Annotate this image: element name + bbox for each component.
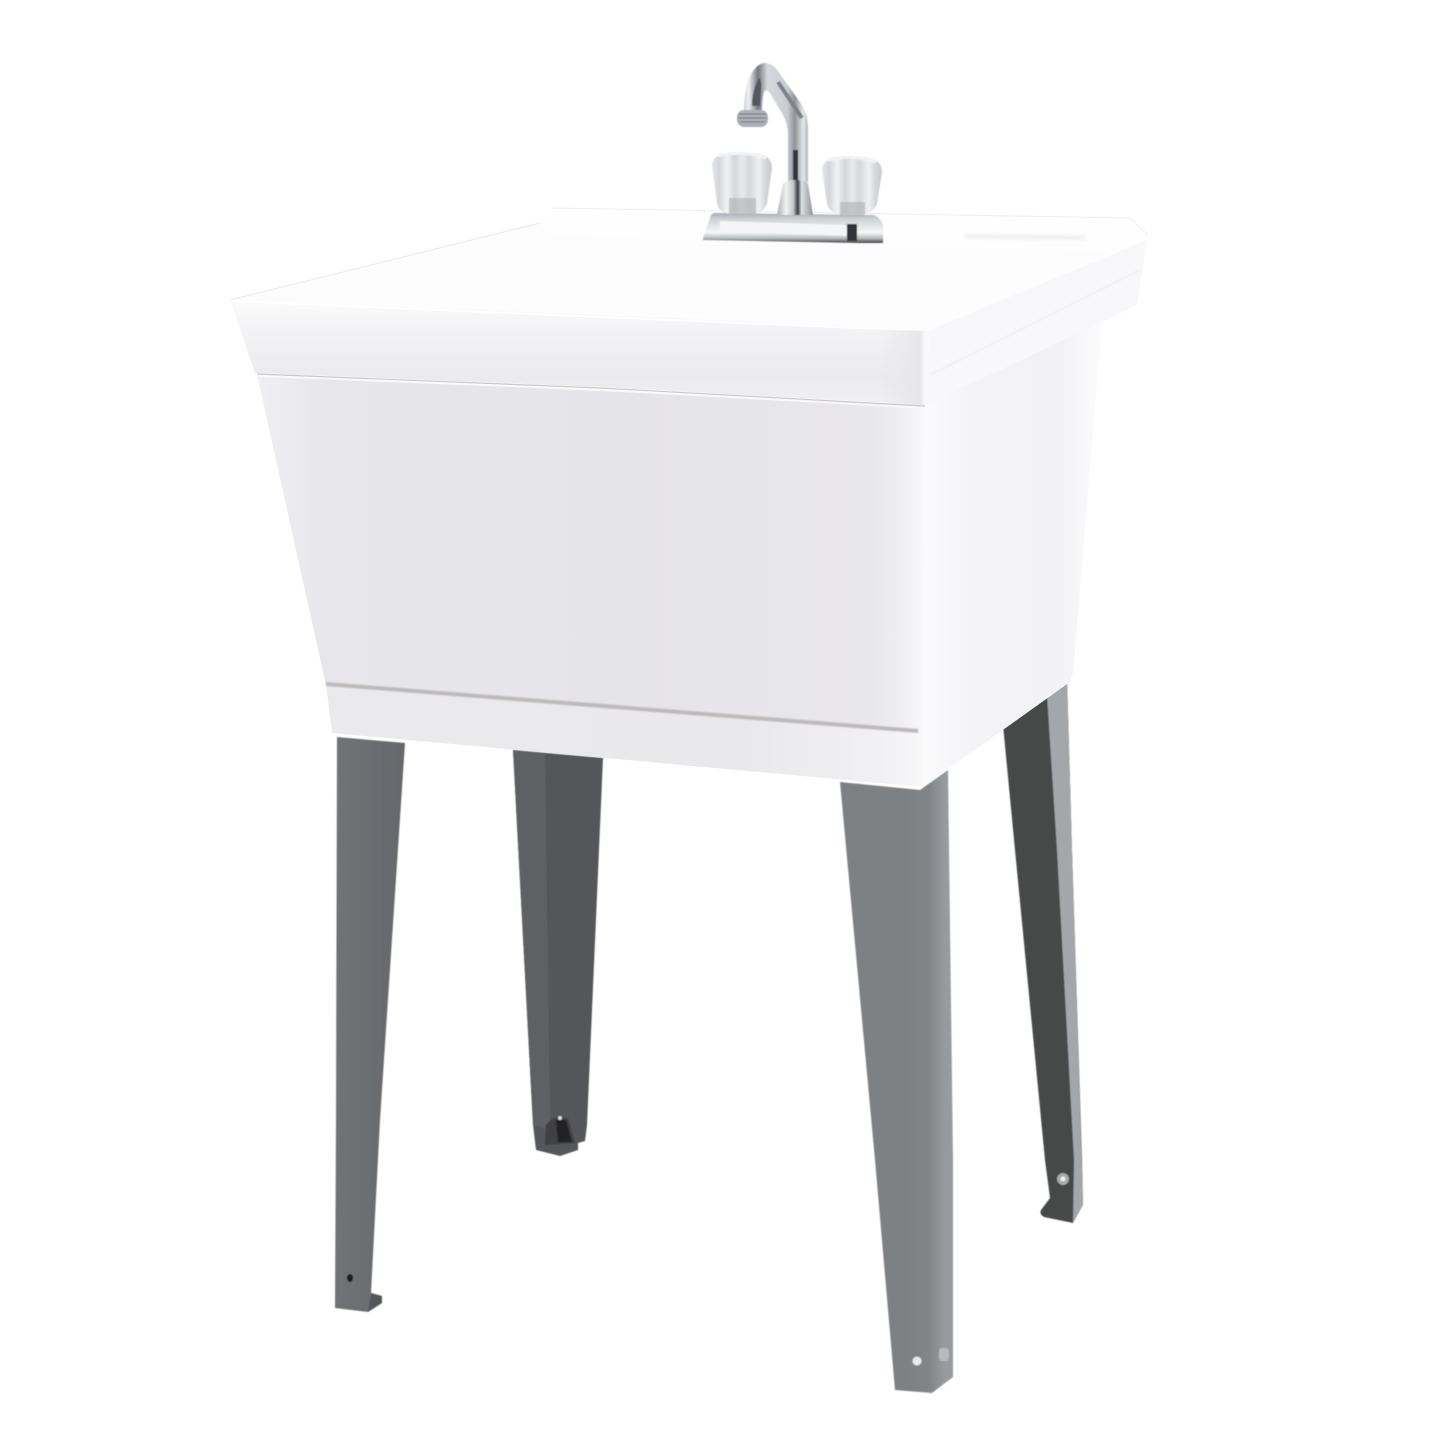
faucet deck plate <box>703 213 883 243</box>
leg bolts <box>912 1348 949 1366</box>
front body panel <box>257 375 925 735</box>
sink tub <box>230 208 1148 787</box>
rim corner shading <box>880 329 930 405</box>
front rim <box>230 300 930 405</box>
back right leg <box>1003 678 1083 1223</box>
top deck and basin <box>230 208 1148 330</box>
right side of tub <box>923 322 1102 787</box>
right side of rim <box>925 240 1147 405</box>
spout <box>744 63 808 182</box>
back ledge shading <box>965 236 1085 238</box>
leg bolt hole <box>347 1274 353 1282</box>
front left leg <box>335 737 405 1312</box>
front right leg <box>840 770 953 1393</box>
aerator <box>737 110 768 127</box>
back left leg <box>513 750 603 1156</box>
right knob <box>822 157 882 214</box>
bottom skirt <box>326 684 923 787</box>
rim shadow line <box>257 374 925 406</box>
spout cone <box>777 180 813 215</box>
bottom groove <box>326 684 918 731</box>
chrome faucet <box>703 63 883 243</box>
left knob <box>712 153 772 214</box>
